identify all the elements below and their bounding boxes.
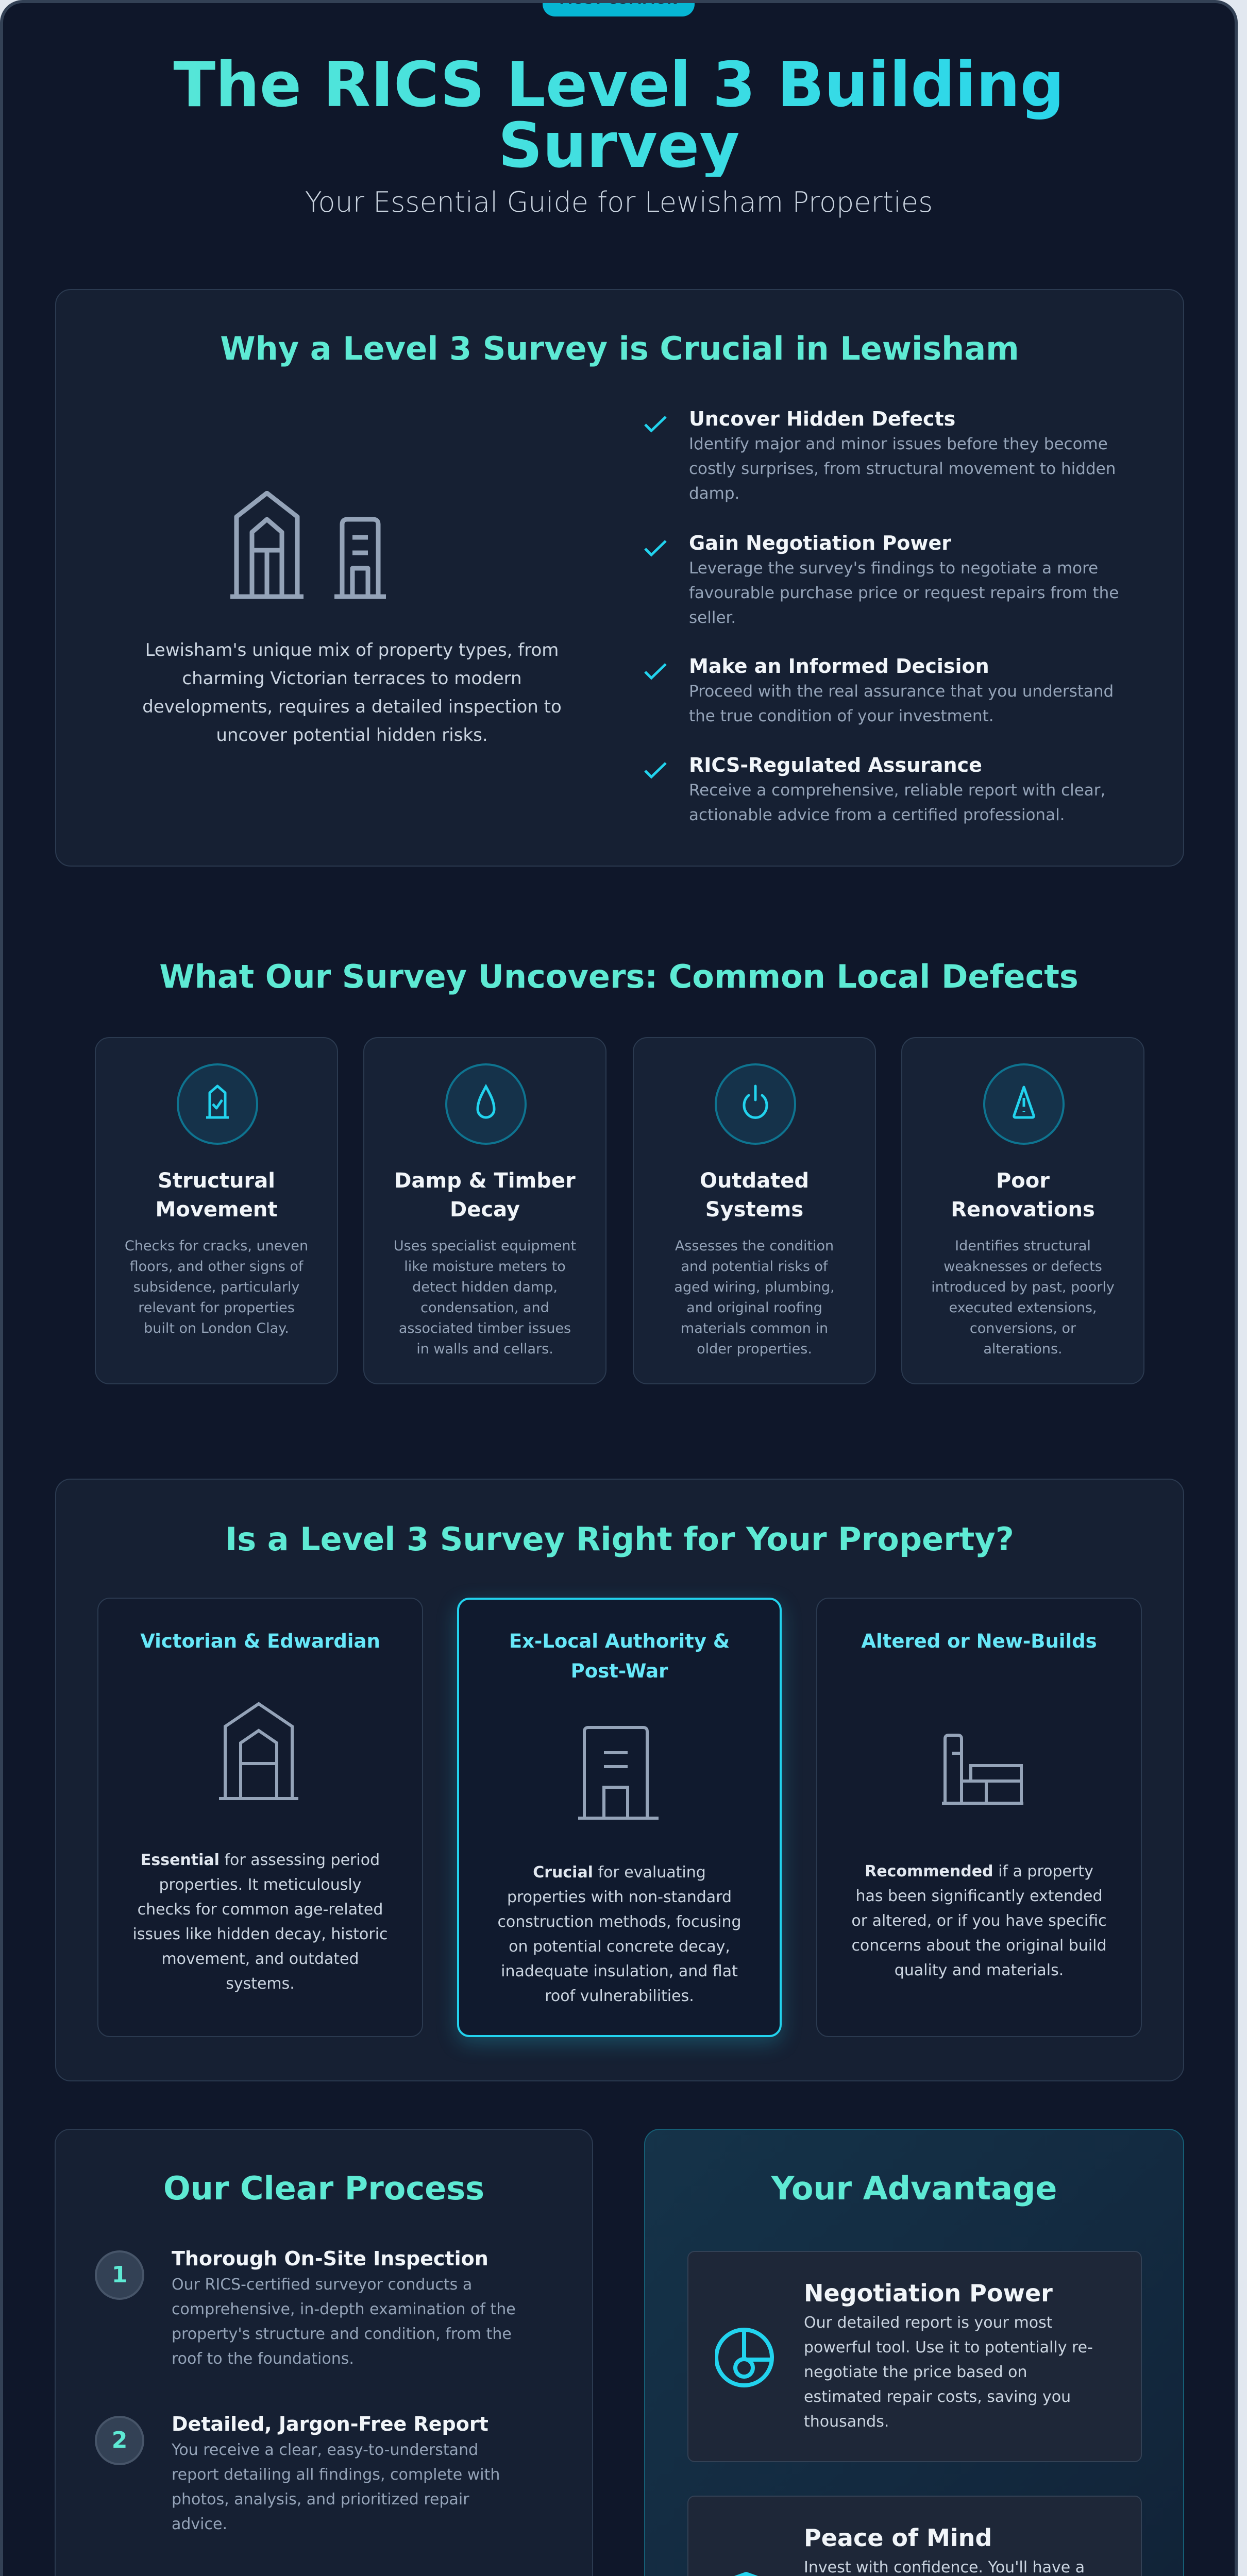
card: outdated systems: Assesses the condition	[675, 1238, 834, 1254]
card: ex-local authority (highlight): Post-War	[571, 1660, 668, 1682]
card: negotiation power: negotiate the price based on	[804, 2363, 1027, 2381]
card: peace of mind	[687, 2496, 1142, 2576]
card: damp	[363, 1037, 606, 1384]
text: lewisham mix: uncover potential hidden risks.	[216, 725, 488, 745]
card: damp: in walls and cellars.	[416, 1341, 553, 1357]
card: ex-local authority (highlight): Crucial for evaluating	[533, 1863, 706, 1882]
title: Survey	[498, 110, 739, 182]
card: negotiation power: estimated repair costs, saving you	[804, 2388, 1071, 2406]
panel: why level 3: Receive a comprehensive, reliable report with clear,	[689, 781, 1105, 800]
text	[132, 1851, 388, 1993]
title	[156, 1169, 277, 1222]
card: outdated systems: Outdated	[700, 1169, 809, 1193]
title: The RICS Level 3 Building	[173, 49, 1065, 121]
step 2	[95, 2416, 579, 2539]
step 1	[95, 2250, 579, 2374]
title	[3, 55, 1235, 177]
text: checks for common age-related	[138, 1901, 383, 1919]
card: ex-local authority (highlight): Ex-Local Authority &	[509, 1630, 730, 1652]
step 1: Our RICS-certified surveyor conducts a	[172, 2276, 472, 2294]
card: altered/new builds	[816, 1598, 1142, 2037]
panel: why level 3	[55, 289, 1184, 867]
text: lewisham mix: developments, requires a detailed inspection to	[142, 697, 562, 717]
card: structural movement	[95, 1037, 338, 1384]
list: benefits: the true condition of your investment.	[689, 707, 994, 725]
card: altered/new builds: or altered, or if you have specific	[851, 1912, 1107, 1930]
card: altered/new builds: concerns about the original build	[851, 1937, 1107, 1955]
desc: floors, and other signs of	[130, 1259, 303, 1275]
icon: house check	[177, 1063, 258, 1145]
card: peace of mind: Invest with confidence. You'll have a	[804, 2558, 1085, 2576]
card: peace of mind: Peace of Mind	[804, 2524, 992, 2552]
subtitle: Your Essential Guide for Lewisham Properties	[305, 186, 933, 218]
desc: built on London Clay.	[144, 1320, 289, 1336]
list: benefits: favourable purchase price or request repairs from the	[689, 584, 1119, 602]
text: movement, and outdated	[161, 1950, 359, 1968]
panel: our clear process	[55, 2129, 593, 2576]
step 2: advice.	[172, 2515, 227, 2533]
text: Essential for assessing period	[141, 1851, 380, 1869]
badge	[543, 0, 695, 16]
card: poor renovations: weaknesses or defects	[943, 1259, 1102, 1275]
step 1: 1	[112, 2262, 127, 2288]
card: ex-local authority (highlight)	[457, 1598, 782, 2037]
step 2: 2	[112, 2427, 127, 2453]
benefit 4	[644, 754, 1105, 824]
card: damp: Uses specialist equipment	[394, 1238, 576, 1254]
text: lewisham mix: Lewisham's unique mix of property types, from	[145, 640, 559, 660]
list: benefits: Uncover Hidden Defects	[689, 408, 955, 430]
desc: Checks for cracks, uneven	[125, 1238, 308, 1254]
heading: why: Why a Level 3 Survey is Crucial in Lewisham	[220, 330, 1019, 367]
list: benefits: Make an Informed Decision	[689, 655, 989, 677]
card: altered/new builds: has been significantly extended	[855, 1887, 1103, 1905]
text: properties. It meticulously	[159, 1876, 362, 1894]
card: altered/new builds: Altered or New-Builds	[861, 1630, 1097, 1652]
card: victorian	[97, 1598, 423, 2037]
card: poor renovations: executed extensions,	[949, 1300, 1097, 1316]
step 2: photos, analysis, and prioritized repair	[172, 2490, 469, 2509]
benefit 3	[644, 655, 1114, 725]
text: lewisham mix	[142, 640, 562, 745]
desc: subsidence, particularly	[133, 1279, 299, 1295]
card: damp: like moisture meters to	[404, 1259, 566, 1275]
list: benefits: RICS-Regulated Assurance	[689, 754, 982, 776]
list: benefits: seller.	[689, 608, 736, 627]
icon: period house	[219, 1702, 298, 1800]
list: benefits: damp.	[689, 484, 739, 503]
card: poor renovations: Renovations	[951, 1198, 1095, 1222]
icon: shield	[720, 2571, 772, 2576]
text: issues like hidden decay, historic	[132, 1925, 388, 1943]
list: benefits: costly surprises, from structural movement to hidden	[689, 460, 1116, 478]
heading: common defects: What Our Survey Uncovers: Common Local Defects	[159, 958, 1079, 995]
step 2: You receive a clear, easy-to-understand	[172, 2441, 478, 2459]
card: outdated systems: older properties.	[697, 1341, 812, 1357]
panel: right for your property	[55, 1479, 1184, 2081]
card: poor renovations: conversions, or	[970, 1320, 1076, 1336]
title: Movement	[156, 1198, 277, 1222]
icon: block	[578, 1726, 659, 1820]
card: negotiation power: powerful tool. Use it to potentially re-	[804, 2338, 1093, 2357]
step 1: comprehensive, in-depth examination of the	[172, 2300, 516, 2318]
card: ex-local authority (highlight): roof vulnerabilities.	[545, 1987, 694, 2005]
panel: your advantage	[644, 2129, 1184, 2576]
card: negotiation power: Negotiation Power	[804, 2279, 1053, 2307]
text: systems.	[226, 1975, 295, 1993]
card: outdated systems: materials common in	[681, 1320, 828, 1336]
card: ex-local authority (highlight): on potential concrete decay,	[509, 1938, 730, 1956]
icon: power	[715, 1063, 796, 1145]
card: outdated systems: Systems	[705, 1198, 803, 1222]
desc: relevant for properties	[138, 1300, 295, 1316]
text: lewisham mix: charming Victorian terraces to modern	[182, 668, 522, 689]
card: altered/new builds: quality and materials.	[895, 1961, 1064, 1979]
list: benefits: Gain Negotiation Power	[689, 532, 951, 554]
list: benefits: Identify major and minor issues before they become	[689, 435, 1108, 453]
step 1: property's structure and condition, from the	[172, 2325, 512, 2343]
panel: why level 3: actionable advice from a certified professional.	[689, 806, 1065, 824]
card: negotiation power	[687, 2251, 1142, 2462]
step 2: Detailed, Jargon-Free Report	[172, 2413, 488, 2435]
card: poor renovations: Poor	[996, 1169, 1050, 1193]
icon: buildings	[230, 491, 386, 599]
list: benefits: Proceed with the real assurance that you understand	[689, 682, 1114, 701]
card: outdated systems: and potential risks of	[681, 1259, 828, 1275]
benefit 2	[644, 532, 1119, 627]
card: altered/new builds: Recommended if a property	[865, 1862, 1093, 1880]
list: benefits: Leverage the survey's findings to negotiate a more	[689, 559, 1098, 578]
card: negotiation power: thousands.	[804, 2413, 889, 2431]
card: damp: Damp & Timber	[394, 1169, 576, 1193]
card: damp: condensation, and	[420, 1300, 549, 1316]
card: victorian: Victorian & Edwardian	[140, 1630, 380, 1652]
benefit 1	[644, 408, 1116, 503]
card: ex-local authority (highlight): properties with non-standard	[507, 1888, 732, 1906]
card: poor renovations: introduced by past, poorly	[931, 1279, 1115, 1295]
card: outdated systems	[633, 1037, 876, 1384]
card: poor renovations	[901, 1037, 1144, 1384]
desc	[125, 1238, 308, 1336]
card: damp: associated timber issues	[399, 1320, 571, 1336]
title: Structural	[158, 1169, 275, 1193]
icon: chart	[715, 2327, 777, 2388]
step 2: report detailing all findings, complete with	[172, 2466, 500, 2484]
icon: extended building	[941, 1734, 1023, 1806]
card: negotiation power: Our detailed report is your most	[804, 2314, 1052, 2332]
card: ex-local authority (highlight): inadequate insulation, and flat	[501, 1962, 738, 1980]
step 1: roof to the foundations.	[172, 2350, 354, 2368]
icon: warning	[983, 1063, 1065, 1145]
card: poor renovations: Identifies structural	[955, 1238, 1091, 1254]
heading: Is a Level 3 Survey Right for Your Property?	[225, 1520, 1014, 1558]
list: benefits	[644, 408, 1119, 824]
step 1: Thorough On-Site Inspection	[172, 2247, 488, 2270]
heading: Your Advantage	[771, 2170, 1057, 2207]
card: damp: Decay	[450, 1198, 520, 1222]
card: poor renovations: alterations.	[983, 1341, 1063, 1357]
heading: Our Clear Process	[163, 2170, 484, 2207]
card: outdated systems: and original roofing	[686, 1300, 822, 1316]
card: damp: detect hidden damp,	[412, 1279, 558, 1295]
card: ex-local authority (highlight): construction methods, focusing	[497, 1913, 742, 1931]
icon: drop	[445, 1063, 527, 1145]
card: outdated systems: aged wiring, plumbing,	[674, 1279, 835, 1295]
